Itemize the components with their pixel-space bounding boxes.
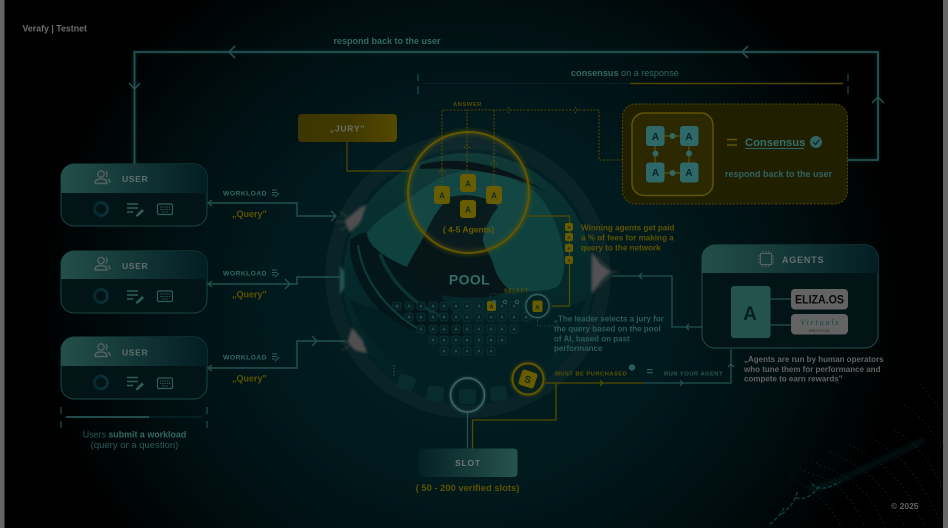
consensus word: Consensus <box>745 137 805 149</box>
wave glow <box>810 440 925 490</box>
slot caption: ( 50 - 200 verified slots) <box>416 482 519 493</box>
users caption: (query or a question) <box>91 440 178 451</box>
selected gold agent: A <box>490 304 494 310</box>
agents card <box>702 245 878 348</box>
agents count: ( 4-5 Agents) <box>443 224 494 234</box>
consensus panel: A <box>652 132 659 143</box>
jury agents <box>434 174 502 218</box>
purchase labels <box>555 364 723 378</box>
agents card: ELIZA.OS <box>795 294 844 306</box>
slot circle and box: SLOT <box>455 458 481 468</box>
jury box <box>298 114 410 171</box>
query labels: „Query" <box>232 209 267 219</box>
consensus response text: respond back to the user <box>725 169 833 179</box>
purchase labels: RUN YOUR AGENT <box>664 372 723 378</box>
leader text: „The leader selects a jury for <box>554 314 664 324</box>
agents caption: who tune them for performance and <box>743 365 881 374</box>
bright wave arcs <box>770 482 840 524</box>
agents caption: compete to earn rewards" <box>744 374 843 384</box>
consensus panel: A <box>652 168 659 179</box>
chip icon <box>758 251 774 267</box>
agents card: AGENTS <box>782 255 824 265</box>
query labels <box>232 209 267 384</box>
leader text: of AI, based on past <box>554 334 630 344</box>
consensus panel: A <box>685 168 693 179</box>
answer dotted lines <box>439 107 622 186</box>
pool label: POOL <box>449 272 490 288</box>
user card 3 <box>61 337 207 399</box>
winning agents text: a % of fees for making a <box>581 234 674 242</box>
workload labels: WORKLOAD <box>223 354 267 362</box>
agent grid: AAAAAAAAA <box>419 327 516 332</box>
jury circle: A <box>439 192 445 200</box>
purchase labels: MUST BE PURCHASED <box>555 372 627 378</box>
leader node <box>526 294 554 326</box>
dotted mark <box>393 365 395 376</box>
agent grid: AAAAAAA <box>431 338 504 343</box>
lower dark area <box>350 300 586 398</box>
purchase gold lines <box>472 380 644 449</box>
winning agents connector <box>527 216 573 306</box>
query labels: „Query" <box>232 374 267 384</box>
users caption <box>83 430 186 451</box>
agents card: Virtuals <box>800 318 838 327</box>
leader text <box>554 314 664 353</box>
winning agents connector: A <box>567 225 571 230</box>
top response arrow line <box>129 46 884 164</box>
agent grid: AAAAAAAAAA <box>395 304 516 309</box>
consensus agents <box>646 126 698 182</box>
pool sphere <box>326 133 610 418</box>
header label: Verafy | Testnet <box>22 24 87 34</box>
consensus panel: A <box>685 132 693 143</box>
winning agents text <box>581 224 675 252</box>
consensus equals <box>727 140 737 145</box>
spark: right <box>592 253 618 293</box>
leader node: A <box>535 304 540 312</box>
workload labels <box>223 190 279 362</box>
agents card: PROTOCOL <box>809 329 831 333</box>
slot circle and box <box>418 378 518 477</box>
spark: left lower <box>340 328 367 353</box>
run agent teal line <box>644 349 734 386</box>
spark: left upper <box>335 205 366 232</box>
jury circle: A <box>465 180 471 188</box>
slot placeholders <box>396 373 508 404</box>
dark core <box>407 195 510 298</box>
winning agents connector: A <box>567 235 571 240</box>
winning agents text: Winning agents get paid <box>581 224 675 232</box>
winning agents text: query to the network <box>581 244 661 252</box>
users bracket <box>61 407 207 428</box>
jury circle: A <box>465 206 471 214</box>
agent grid: AAAAAAAAAAA <box>407 315 528 320</box>
top response label: respond back to the user <box>333 36 441 46</box>
leader text: performance <box>554 344 603 353</box>
spark: left middle <box>340 265 344 295</box>
consensus check <box>810 136 822 148</box>
user card 3: USER <box>122 348 148 358</box>
workload connector lines <box>208 200 345 371</box>
consensus bracket: consensus on a response <box>571 68 679 78</box>
users caption: Users submit a workload <box>83 430 186 440</box>
user card 2 <box>61 251 207 313</box>
agents caption <box>743 355 884 384</box>
agents caption: „Agents are run by human operators <box>744 355 884 364</box>
slot coin: S <box>523 374 533 387</box>
slot coin <box>512 364 544 394</box>
copyright: © 2025 <box>891 501 919 511</box>
select label: SELECT <box>504 288 529 294</box>
workload labels: WORKLOAD <box>223 190 267 198</box>
select dots <box>490 294 519 304</box>
consensus bracket <box>418 68 848 94</box>
jury box: „JURY" <box>330 124 365 134</box>
user card 1 <box>61 164 207 226</box>
winning agents connector: A <box>567 246 571 251</box>
winning agents connector: A <box>567 258 571 263</box>
user card 1: USER <box>122 174 148 184</box>
top dark streak <box>420 161 545 192</box>
leader text: the query based on the pool <box>554 324 661 334</box>
dark swirl <box>350 233 470 336</box>
agent grid <box>393 288 530 355</box>
agents card: A <box>743 304 757 325</box>
teal lobes <box>367 170 564 291</box>
sphere body <box>343 153 593 403</box>
purchase labels: = <box>647 366 653 378</box>
answer label: ANSWER <box>453 102 482 108</box>
jury circle <box>408 132 529 253</box>
consensus connectors <box>655 136 689 173</box>
jury circle: A <box>491 192 497 200</box>
consensus panel <box>622 104 848 204</box>
workload labels: WORKLOAD <box>223 270 267 278</box>
user card 2: USER <box>122 261 148 271</box>
agent grid: AAAAA <box>442 349 493 354</box>
query labels: „Query" <box>232 290 267 300</box>
agents connector <box>612 273 702 330</box>
dotted wave decoration <box>790 385 942 528</box>
